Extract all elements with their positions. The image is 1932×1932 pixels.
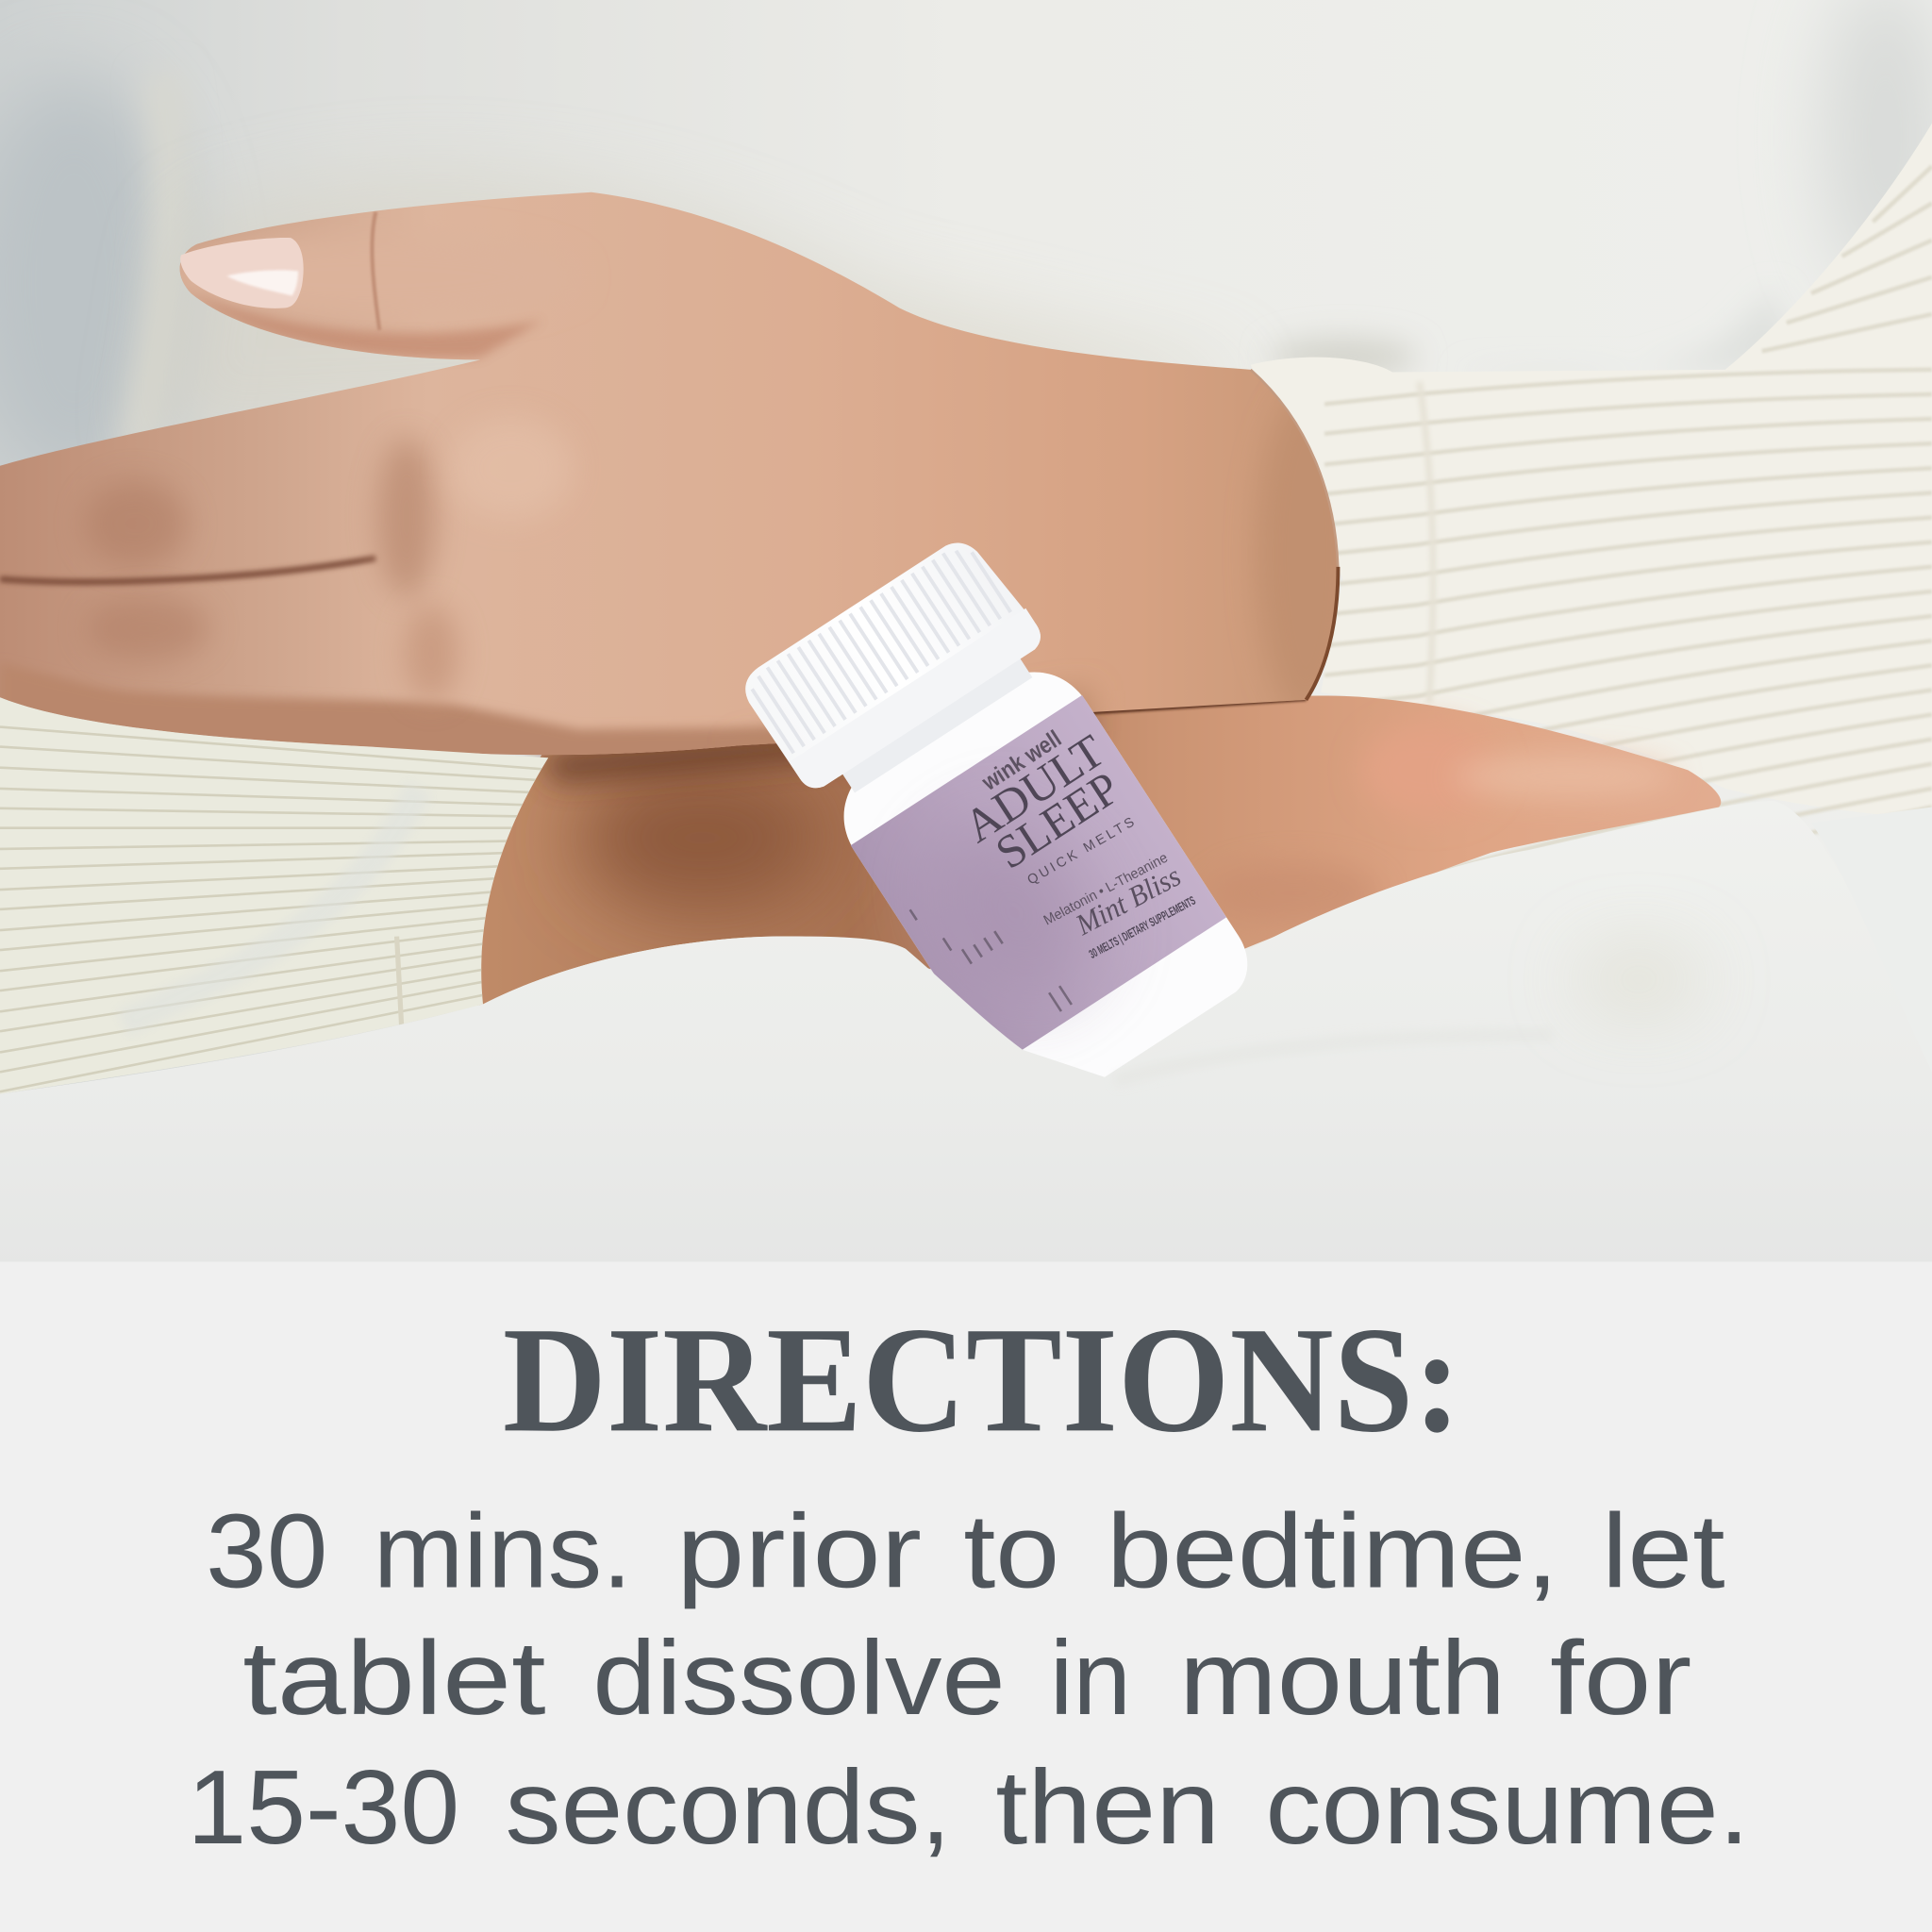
directions body text: tablet xyxy=(242,1619,546,1737)
directions body text: in xyxy=(1050,1619,1131,1737)
directions body text: 15-30 xyxy=(188,1748,459,1866)
ingredients: Melatonin • L-Theanine xyxy=(1041,850,1171,928)
heading: DIRECTIONS: xyxy=(503,1295,1461,1463)
directions body text: let xyxy=(1602,1491,1725,1609)
directions body text: for xyxy=(1550,1619,1691,1737)
panel: photo of hands holding bottle xyxy=(0,0,1932,1269)
right sweater sleeve xyxy=(1251,124,1932,930)
directions body text: consume. xyxy=(1265,1748,1750,1866)
directions body text: seconds, xyxy=(506,1748,951,1866)
directions body text: 30 xyxy=(206,1491,327,1609)
directions body text: mouth xyxy=(1179,1619,1506,1737)
product bottle xyxy=(736,527,1263,1128)
directions body text: dissolve xyxy=(592,1619,1006,1737)
brand name: wink well xyxy=(977,726,1066,796)
directions body text: mins. xyxy=(374,1491,632,1609)
bottle body xyxy=(809,631,1263,1124)
count: 30 MELTS | DIETARY SUPPLEMENTS xyxy=(1087,893,1198,961)
crease between wrist and cuff xyxy=(1251,370,1338,579)
directions body text: prior xyxy=(676,1491,922,1609)
front blanket fold xyxy=(0,936,1553,1269)
left sweater sleeve xyxy=(0,697,555,1094)
side panel fine print xyxy=(910,864,1072,1050)
upper hand and wrist xyxy=(0,192,1356,789)
directions body text: bedtime, xyxy=(1107,1491,1558,1609)
bottle label: SLEEP xyxy=(987,761,1128,879)
bottle label xyxy=(851,695,1226,1068)
product name: ADULT xyxy=(955,724,1113,853)
background pillow xyxy=(0,0,1932,1269)
lower forearm and hand xyxy=(477,695,1721,1017)
icon: fingernail xyxy=(180,238,304,308)
knit ribs xyxy=(0,727,555,1091)
directions body text: to xyxy=(963,1491,1059,1609)
product type: QUICK MELTS xyxy=(1025,815,1137,888)
knit ribs xyxy=(1324,166,1932,930)
directions body text: then xyxy=(995,1748,1220,1866)
flavour: Mint Bliss xyxy=(1070,859,1186,941)
panel: directions text xyxy=(0,1261,1932,1932)
bottle cap xyxy=(736,527,1047,795)
directions body text xyxy=(188,1491,1750,1866)
back blanket xyxy=(0,801,1932,1269)
